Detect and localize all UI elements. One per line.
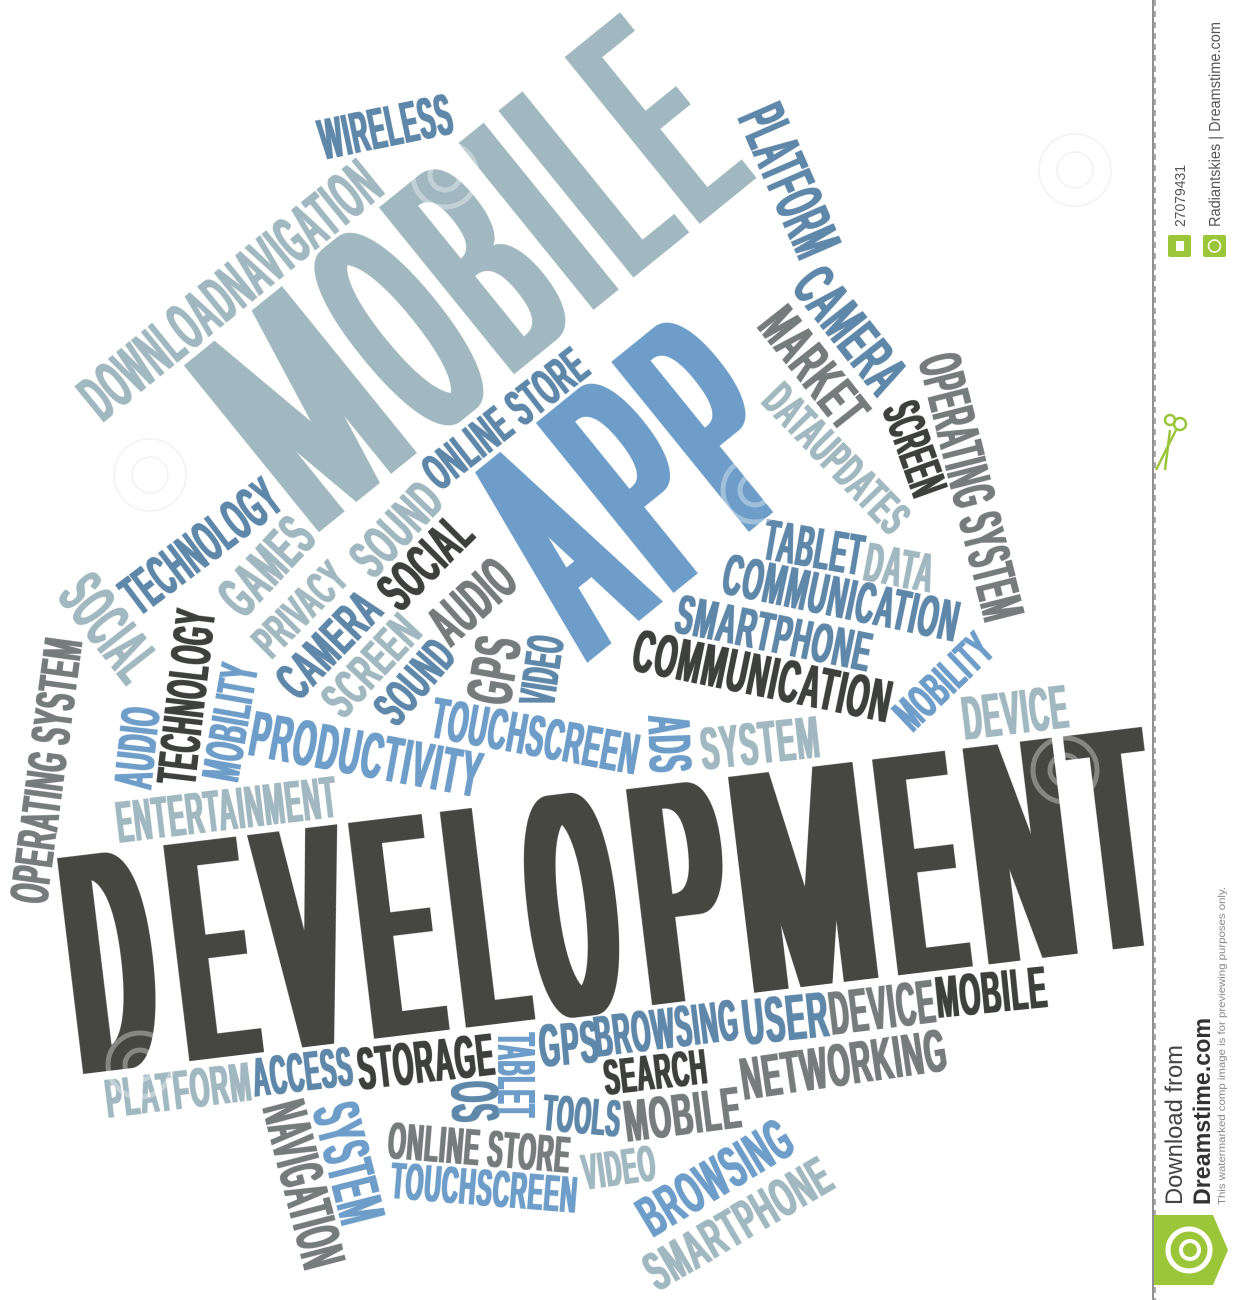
watermark spirals — [108, 134, 1111, 1097]
word cloud: mobile app development: ENTERTAINMENT — [113, 764, 341, 856]
word cloud: mobile app development: PLATFORM — [723, 94, 856, 269]
sidebar divider lines — [1153, 0, 1155, 1300]
heading word: MOBILE: O — [257, 168, 541, 491]
word: PRIVACY: PRIVACY — [242, 550, 358, 667]
word cloud: mobile app development: VIDEO — [509, 631, 576, 709]
heading word: APP: A — [414, 384, 699, 710]
word cloud: mobile app development: GPS — [536, 1008, 602, 1080]
word cloud: mobile app development: USER — [739, 977, 833, 1059]
word cloud: mobile app development: ONLINE STORE — [386, 1112, 573, 1185]
heading word: DEVELOPMENT: N — [955, 670, 1085, 1031]
word: MOBILITY: MOBILITY — [884, 623, 1005, 741]
word cloud: mobile app development: OPERATING SYSTEM — [905, 347, 1037, 628]
photographer credit: Radiantskies | Dreamstime.com — [1207, 22, 1224, 227]
word cloud: mobile app development: AUDIO — [101, 703, 172, 791]
heading word: DEVELOPMENT: V — [249, 757, 361, 1116]
heading word: DEVELOPMENT: P — [619, 711, 743, 1072]
word cloud: mobile app development: ADS — [635, 714, 704, 774]
word cloud: mobile app development: STORAGE — [354, 1021, 499, 1103]
word cloud: mobile app development: VIDEO — [579, 1134, 660, 1201]
heading word: DEVELOPMENT: M — [718, 694, 888, 1059]
heading word: MOBILE: I — [415, 70, 663, 363]
heading word: DEVELOPMENT: D — [51, 781, 168, 1140]
word: BROWSING lower: BROWSING — [626, 1106, 805, 1249]
word cloud: mobile app development: TOUCHSCREEN — [427, 686, 645, 788]
word cloud: mobile app development: NETWORKING — [736, 1017, 952, 1113]
preview disclaimer: This watermarked comp image is for previewing purposes only. — [1216, 887, 1228, 1205]
icon: scissors — [1156, 415, 1186, 470]
word: SOUND: SOUND — [337, 468, 456, 588]
word cloud: mobile app development: DEVICE — [958, 673, 1073, 754]
word cloud: mobile app development: MOBILE — [933, 954, 1051, 1031]
heading word: MOBILE: M — [140, 233, 462, 586]
word cloud: mobile app development: TABLET — [486, 1033, 546, 1118]
download label: Download from — [1161, 1045, 1188, 1205]
word: CAMERA lower: CAMERA — [264, 579, 394, 710]
dreamstime brand: Dreamstime.com — [1189, 1018, 1216, 1205]
word: SMARTPHONE lower: SMARTPHONE — [633, 1144, 844, 1300]
word cloud: mobile app development: TECHNOLOGY — [109, 465, 294, 627]
word cloud: mobile app development: TOUCHSCREEN — [389, 1152, 580, 1225]
word: DATAUPDATES: DATAUPDATES — [752, 374, 920, 545]
word cloud: mobile app development: SEARCH — [601, 1038, 711, 1106]
word cloud: mobile app development: PLATFORM — [102, 1049, 255, 1130]
word: SOCIAL left: SOCIAL — [44, 560, 174, 697]
word cloud: mobile app development: SCREEN — [871, 394, 958, 504]
word: MARKET: MARKET — [746, 295, 882, 442]
ribbon logo — [1154, 1215, 1228, 1285]
heading word: DEVELOPMENT: O — [512, 725, 631, 1084]
heading word: APP: P — [493, 319, 779, 646]
word: GPS: GPS — [452, 630, 536, 709]
word cloud: mobile app development: PRODUCTIVITY — [244, 697, 489, 812]
word cloud: mobile app development: ACCESS — [249, 1034, 357, 1109]
word: CAMERA: CAMERA — [779, 254, 921, 408]
word: SCREEN light: SCREEN — [310, 602, 433, 728]
heading word: MOBILE: B — [337, 104, 621, 426]
word cloud: mobile app development: MOBILITY — [191, 658, 270, 785]
word cloud: mobile app development: DEVICE — [825, 967, 940, 1049]
word: ONLINE STORE: ONLINE STORE — [412, 337, 600, 501]
heading word: APP: P — [568, 258, 855, 585]
heading word: DEVELOPMENT: E — [867, 683, 974, 1042]
word cloud: mobile app development: BROWSING — [591, 988, 743, 1070]
word: GAMES: GAMES — [205, 503, 329, 629]
heading word: DEVELOPMENT: L — [434, 736, 536, 1094]
word cloud: mobile app development: WIRELESS — [314, 82, 459, 173]
word: SOCIAL: SOCIAL — [365, 501, 486, 621]
heading word: DEVELOPMENT: E — [342, 746, 451, 1105]
word cloud: mobile app development: DATA — [860, 530, 940, 605]
word cloud: mobile app development: MOBILE — [620, 1074, 746, 1155]
icon: copyright badge — [1203, 235, 1226, 257]
icon: id badge — [1168, 235, 1191, 257]
word: AUDIO: AUDIO — [415, 544, 530, 658]
word: SOUND steel: SOUND — [363, 628, 467, 735]
word cloud: mobile app development: TECHNOLOGY — [144, 605, 228, 788]
word cloud: mobile app development: SYSTEM — [697, 703, 824, 783]
image id: 27079431 — [1172, 165, 1189, 227]
word cloud: mobile app development: COMMUNICATION — [627, 617, 898, 736]
word cloud: mobile app development: TOOLS — [541, 1084, 624, 1149]
word cloud: mobile app development: TABLET — [759, 508, 869, 589]
heading word: DEVELOPMENT: E — [158, 769, 265, 1127]
word cloud: mobile app development: SMARTPHONE — [671, 582, 878, 684]
word cloud: mobile app development: OS — [436, 1080, 513, 1124]
word cloud: mobile app development: OPERATING SYSTEM — [0, 634, 95, 907]
